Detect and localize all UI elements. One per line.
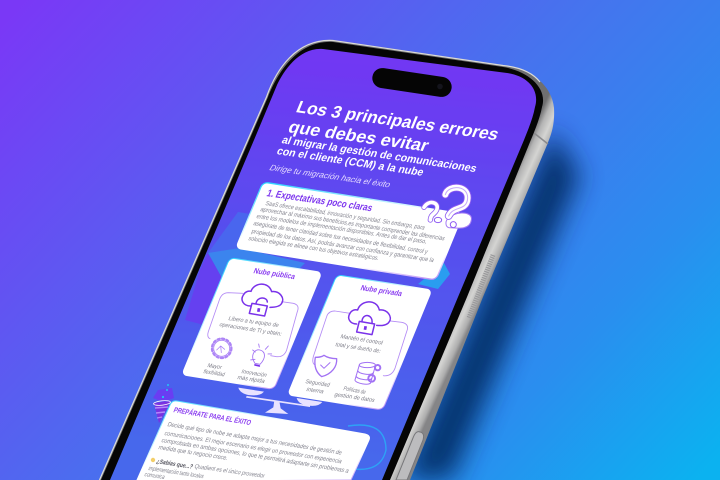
cloud [242,284,283,307]
title: Los 3 principales errores [293,97,502,144]
question dots [434,217,456,228]
card body text: Políticas de [342,386,367,396]
shield icon [315,355,337,377]
cloud [349,302,390,326]
subtitle: con el cliente (CCM) a la nube [275,145,426,179]
decorative blue wedge [208,248,305,278]
card body text: Mayor [206,363,223,371]
icon: party popper [153,384,174,423]
phone silver frame [99,40,554,480]
card body text: propiedad de los datos. Así, podrás avanzar con confianza y garantizar que la [250,228,435,264]
decorative cyan corner [418,263,450,289]
card body text: comunicaciones. El mejor escenario es elegir un proveedor con experiencia [163,430,343,465]
title: que debes evitar [285,117,433,155]
card body text: SaaS ofrece escalabilidad, innovación y seguridad. Sin embargo, para [264,200,426,232]
decorative ring [348,425,386,469]
card body text: ¿Sabías que...? [155,458,194,471]
card heading: Nube privada [359,283,404,298]
tagline: Dirige tu migración hacia el éxito [268,162,392,189]
phone black bezel [101,42,543,480]
card heading: 1. Expectativas poco claras [265,188,374,214]
gear icon [212,339,231,358]
lock keyhole [364,326,367,330]
popper rim [153,400,171,406]
frame antenna band [534,133,548,144]
card background [137,401,370,480]
soft wedge left of the first card [208,212,249,253]
lock keyhole [257,308,260,312]
phone notch [371,67,453,98]
decorative purple wedge [185,253,224,325]
screen background [110,48,536,480]
card body text: más rápida [236,375,266,385]
icon: light bulb emoji [151,458,155,462]
panel: nube pública [182,258,322,389]
database icon [355,362,375,384]
card body text: Innovación [240,369,268,379]
blob behind marks [446,213,471,228]
left edge highlight [100,40,540,480]
icon: balance scale [238,388,322,414]
right dish [297,398,322,406]
panel: nube privada [288,275,432,410]
card background [182,258,322,389]
card body text: total y sé dueño de: [334,342,382,355]
subtitle: al migrar la gestión de comunicaciones [280,134,479,175]
card body text: flexibilidad [202,369,226,378]
phone screen [110,48,536,480]
card body text [202,316,283,385]
popper cone [154,401,171,423]
card background [236,182,463,280]
card body text: Seguridad [304,379,331,389]
light bulb icon [251,344,272,366]
base [265,401,288,414]
card body text: operaciones de TI y obtén: [218,322,283,338]
card heading: Nube pública [252,266,297,281]
card body text [304,334,384,404]
cloud connector and closed lock [313,302,408,384]
closed lock [357,316,375,335]
card body text: medida que tu negocio crece. [157,444,229,462]
big question mark [445,188,468,216]
card body text [247,200,446,264]
small gears icon [368,365,380,382]
card body text: entre los modelos de implementación disponibles. Antes de dar el paso, [255,213,428,245]
card body text: asegúrate de tener claridad sobre tus necesidades de flexibilidad, control y [252,220,430,256]
card body text: aprovechar al máximo sus beneficios,es importante comprender las diferencias [259,206,446,242]
connector line [208,293,298,357]
card body text: comprobada en ambas opciones, lo que te permitirá adaptarte sin problemas a [160,437,350,475]
card body text: solución elegida se alinee con tus objetivos estratégicos. [247,235,380,262]
card body text: Libero a tu equipo de [227,316,280,329]
card body text [143,421,350,480]
connector line [313,311,408,376]
notch camera [437,84,443,89]
side button [396,432,424,480]
card body text: gestión de datos [333,392,376,404]
volume speaker strip [469,255,493,318]
phone shadow [402,130,580,480]
small question mark [424,202,437,220]
card background [288,275,432,410]
cloud connector and open lock [208,284,298,366]
beam [246,396,310,407]
card body text: Decide qué tipo de nube se adapta mejor a tus necesidades de gestión de [166,421,343,457]
popper stripes [155,407,168,418]
left dish [238,388,264,395]
open lock [249,298,267,316]
panel: prepárate para el éxito [137,401,370,480]
card body text: Mantén el control [339,334,384,347]
icon: question marks [424,188,471,228]
card heading: PREPÁRATE PARA EL ÉXITO [172,405,253,427]
popper burst [153,388,174,402]
confetti [162,384,169,398]
card body text: interna [305,387,325,395]
panel: expectativas poco claras [236,182,463,280]
